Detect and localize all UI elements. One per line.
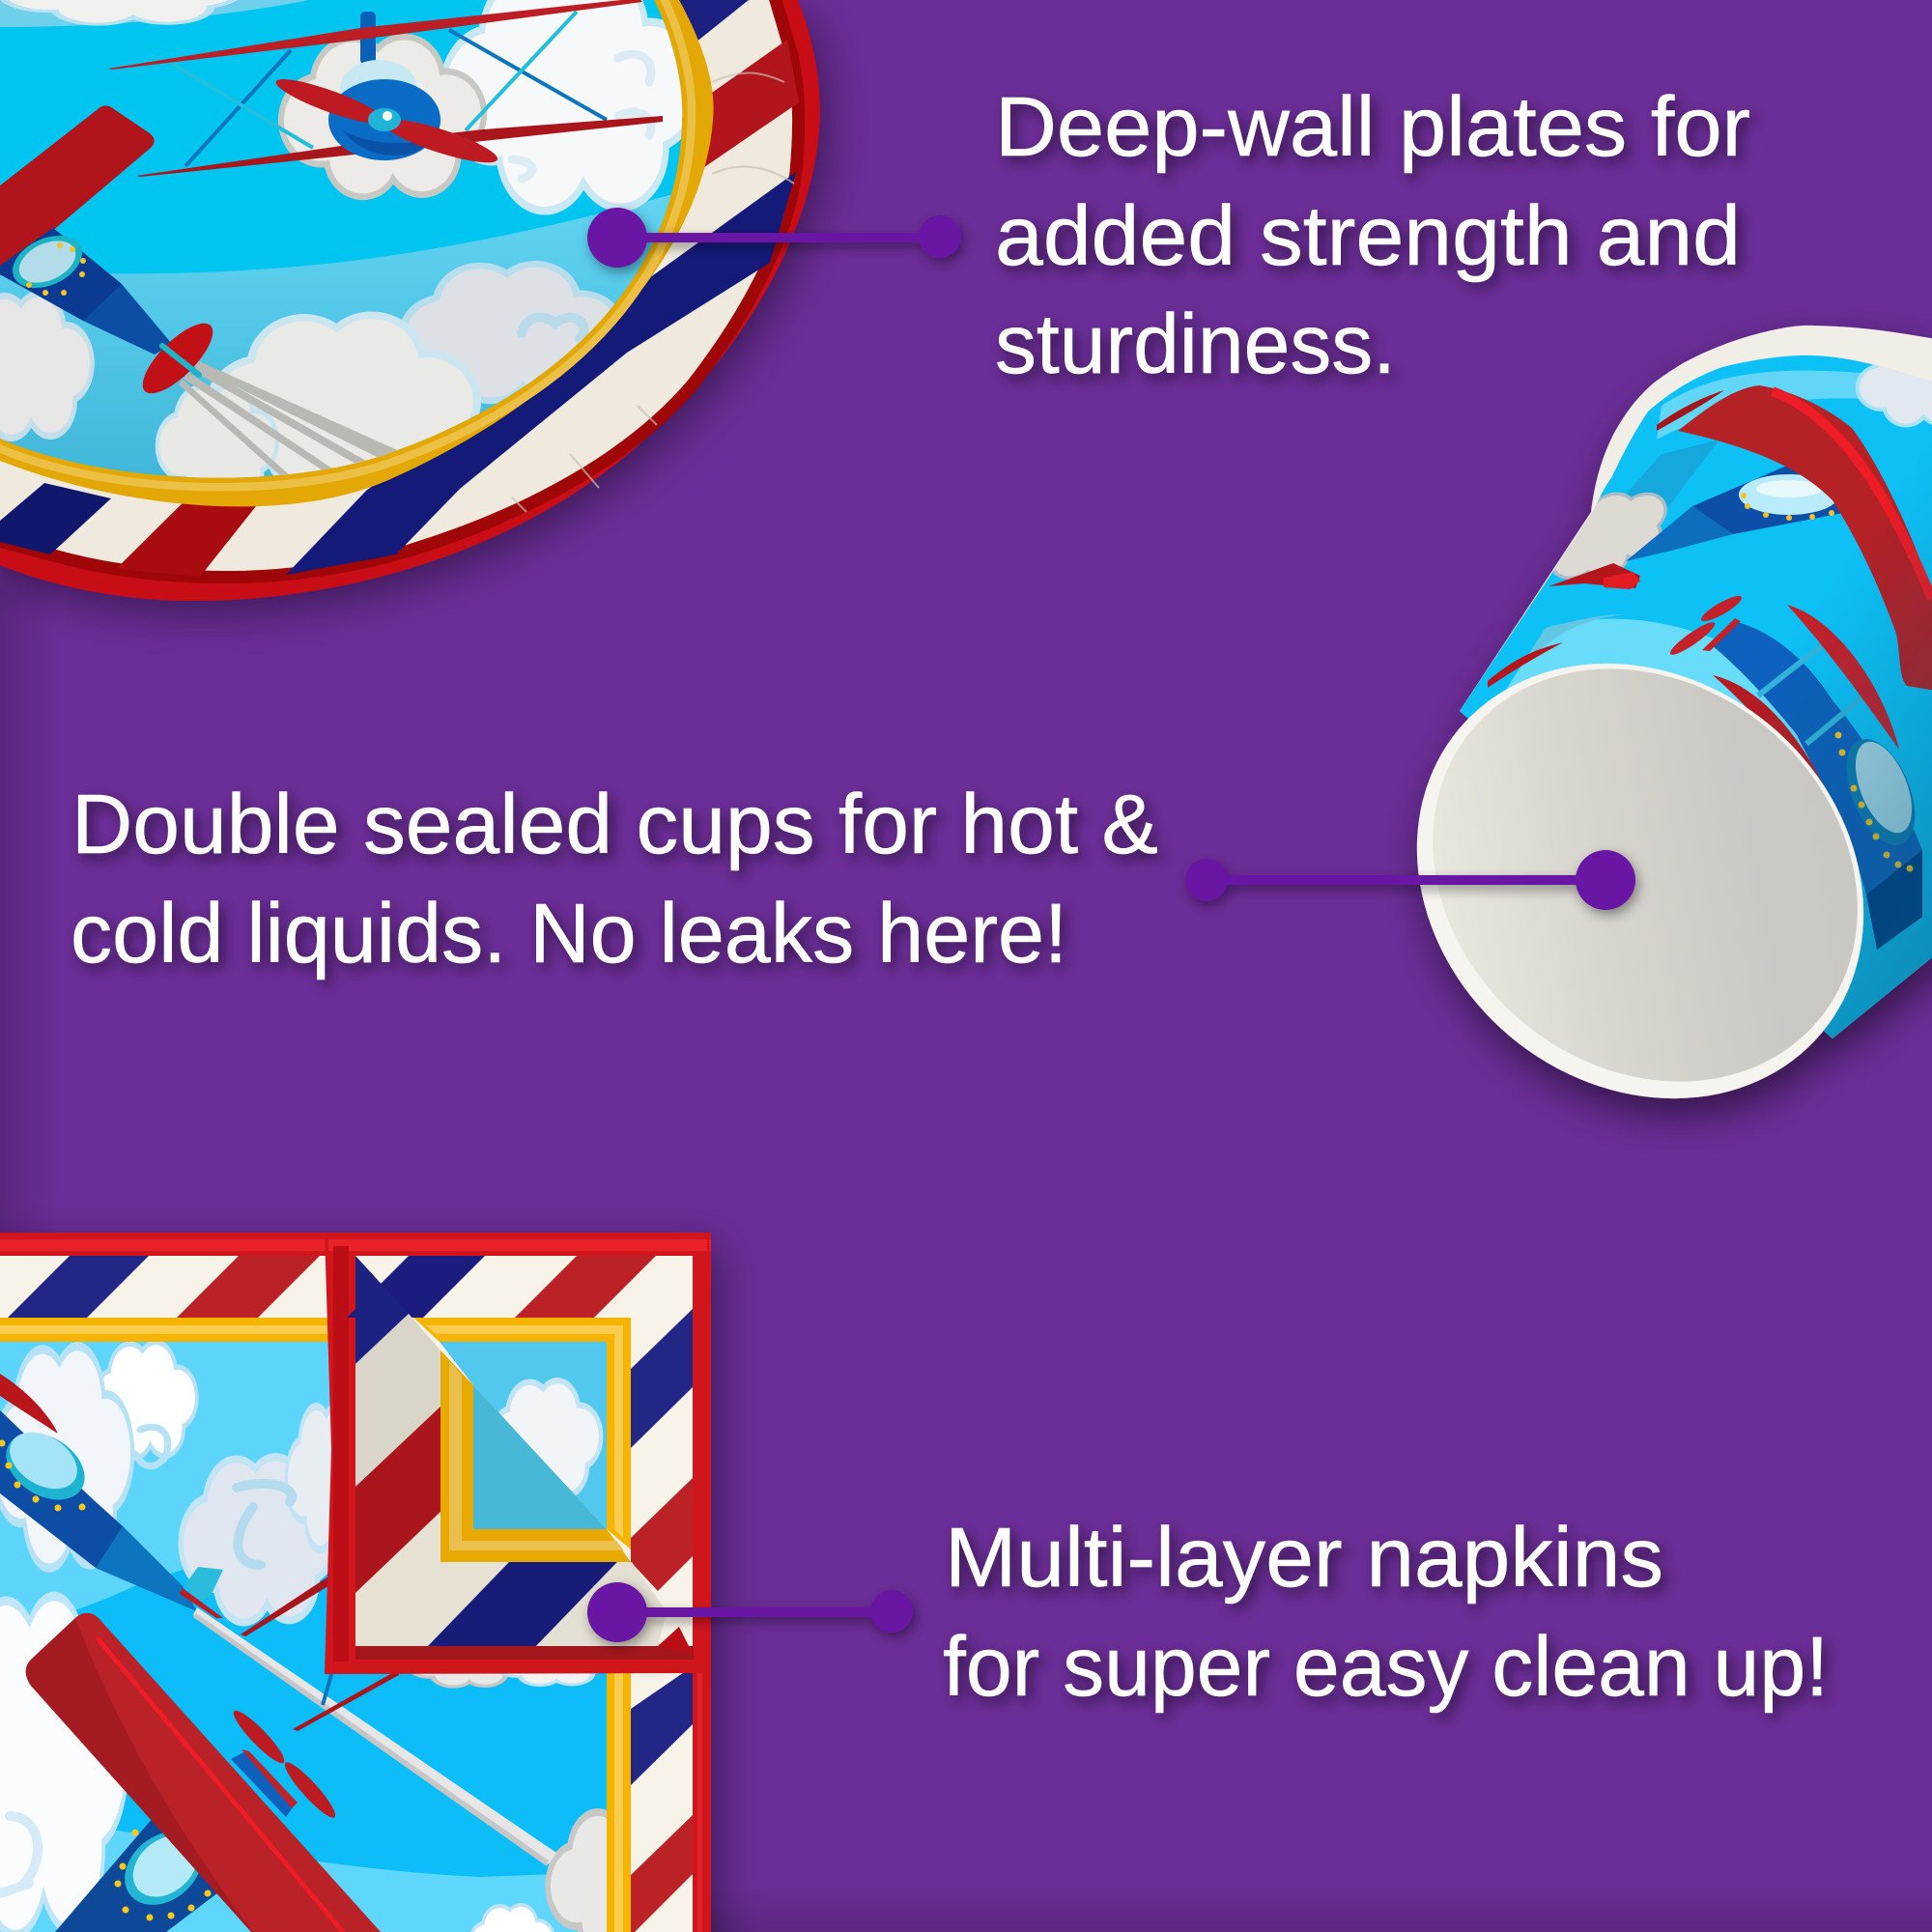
icon: cloud behind biplane	[284, 40, 481, 193]
icon: cup red wing	[1678, 385, 1932, 692]
icon: big red wing	[26, 1613, 389, 1932]
plate outer rim	[0, 0, 820, 601]
callout: napkin pointer	[587, 1582, 913, 1642]
text block: plates: sturdiness.	[995, 298, 1396, 391]
plate gold ring	[0, 0, 714, 506]
napkin top fold	[325, 1233, 711, 1674]
napkin back layer stripes	[0, 1256, 693, 1932]
icon: cup lower light band	[1506, 618, 1813, 766]
icon: cloud in fold window	[493, 1383, 599, 1493]
napkin artwork: sky, clouds, planes	[0, 1342, 607, 1932]
plate artwork: sky, clouds, planes	[0, 0, 696, 502]
icon: red wing	[0, 105, 155, 275]
text block: plates	[995, 80, 1750, 391]
icon: cup cloud	[1552, 493, 1667, 580]
icon: right white cloud	[444, 0, 696, 207]
text block: napkins: for super easy clean up!	[943, 1620, 1829, 1714]
plate striped wall	[0, 0, 799, 578]
folded corner flap	[355, 1256, 693, 1654]
icon: biplane	[108, 0, 663, 177]
cup rim and body	[1460, 326, 1932, 1038]
napkin back layer border	[0, 1233, 711, 1932]
icon: blue plane body	[0, 228, 213, 394]
icon: napkin clouds	[95, 1345, 195, 1455]
callout: plate pointer	[587, 208, 961, 268]
icon: lower plane propeller	[229, 1706, 340, 1823]
callout: cup pointer	[1185, 850, 1635, 910]
text block: cups	[71, 778, 1158, 980]
text block: napkins: Multi-layer napkins	[945, 1511, 1663, 1605]
icon: silver trail	[193, 1607, 556, 1864]
text block: plates: Deep-wall plates for	[995, 80, 1750, 174]
icon: lower clouds	[406, 268, 618, 398]
text block: cups: Double sealed cups for hot &	[71, 778, 1158, 871]
icon: lower plane body	[55, 1816, 226, 1932]
icon: biplane wings	[241, 1575, 331, 1636]
cup printed artwork	[1449, 328, 1932, 1063]
paper cup	[1401, 321, 1932, 1138]
paper plate	[0, 0, 820, 601]
icon: upper plane body	[1488, 390, 1848, 688]
top layer gold and sky	[413, 1318, 631, 1549]
paper napkin	[0, 1233, 711, 1932]
text block: plates: added strength and	[995, 189, 1741, 283]
icon: napkin upper plane	[0, 1374, 223, 1618]
cup base	[1328, 574, 1932, 1188]
text block: cups: cold liquids. No leaks here!	[71, 887, 1067, 980]
top layer red border	[325, 1233, 711, 1674]
napkin back sky	[0, 1318, 631, 1932]
icon: smoke trails	[179, 356, 402, 478]
icon: top cloud	[5, 0, 237, 23]
icon: lower plane body	[1667, 592, 1929, 950]
top layer striped field	[355, 1256, 693, 1646]
text block: napkins	[943, 1511, 1829, 1714]
